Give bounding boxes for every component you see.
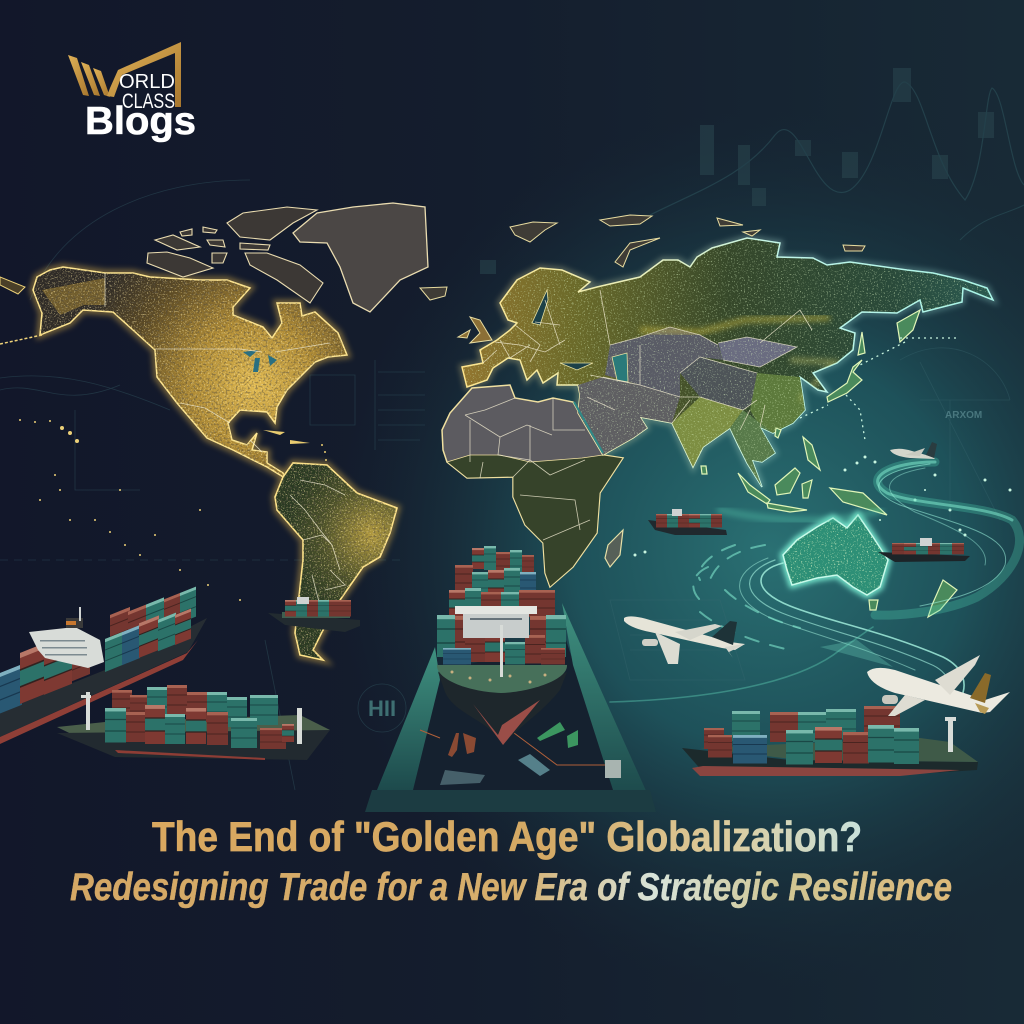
containers front row bbox=[105, 705, 294, 749]
city lights speckle bbox=[33, 267, 396, 660]
mast bbox=[948, 720, 953, 752]
logo text: Blogs bbox=[85, 100, 196, 143]
bridge bbox=[455, 606, 537, 614]
Great Lakes bbox=[243, 350, 277, 372]
plane: middle bbox=[624, 616, 745, 664]
front containers bbox=[704, 725, 919, 764]
containers bbox=[0, 581, 196, 715]
back containers bbox=[732, 706, 900, 742]
ship: left large container ship bbox=[0, 581, 207, 744]
logo: World Class Blogs bbox=[68, 42, 196, 143]
hull and bow bbox=[438, 672, 567, 745]
Southeast Asia green bbox=[730, 410, 775, 487]
right pier bbox=[562, 603, 647, 793]
NE China yellow coast bbox=[790, 360, 835, 400]
left pier bbox=[377, 647, 440, 790]
continent: Australia bbox=[780, 510, 890, 600]
South China green bbox=[750, 373, 805, 433]
hull bbox=[0, 618, 207, 737]
northern islands and UK bbox=[420, 215, 865, 343]
continent: South America bbox=[275, 463, 397, 660]
front stacks bbox=[437, 615, 566, 664]
Mongolia grey bbox=[718, 337, 797, 367]
ship: small ship near South America bbox=[268, 597, 360, 632]
ship: lower right container ship bbox=[682, 706, 978, 776]
water basin bbox=[412, 640, 615, 790]
faint panel label: ARXOM bbox=[945, 410, 982, 421]
superstructure bbox=[29, 627, 104, 668]
Red Sea bbox=[574, 402, 603, 453]
Southern Siberia yellow streaks bbox=[640, 318, 830, 332]
plane: large right bbox=[867, 655, 1010, 716]
faint roundel mark: HII bbox=[368, 696, 396, 721]
Iran and Arabia grey bbox=[578, 377, 680, 455]
logo text: ORLD bbox=[119, 70, 175, 93]
Caribbean islands bbox=[263, 430, 327, 461]
ship: lower left container ship bbox=[57, 685, 330, 760]
rear stacks bbox=[449, 546, 555, 618]
continent: North America bbox=[33, 267, 347, 478]
logo mark: gold W and roof bbox=[68, 42, 181, 107]
title: The End of "Golden Age" Globalization? bbox=[152, 813, 862, 860]
central port dock bbox=[365, 603, 656, 812]
ship: Indian Ocean small container ship bbox=[648, 509, 727, 535]
speckle on Eurasia bbox=[460, 230, 1000, 490]
masts bbox=[86, 692, 90, 730]
Canadian Arctic islands bbox=[147, 207, 323, 303]
bottom quay bbox=[365, 790, 656, 812]
continent: Greenland bbox=[293, 203, 428, 312]
glow under Eurasia bbox=[462, 238, 993, 487]
Alaska bright interior bbox=[42, 278, 105, 315]
faint grid arcs and data panels bbox=[0, 180, 1010, 790]
swirling trade routes bbox=[610, 462, 1020, 705]
glow under the Americas bbox=[33, 267, 397, 660]
country borders bbox=[105, 273, 812, 625]
Kazakhstan and Central Asia grey bbox=[605, 327, 723, 397]
world map bbox=[0, 200, 1012, 670]
containers back row bbox=[112, 685, 278, 727]
Central Africa green region bbox=[447, 455, 623, 587]
continent: Eurasia bbox=[462, 238, 993, 487]
Tibet grey bbox=[680, 357, 757, 410]
plane: small top right bbox=[890, 442, 937, 459]
Aleutian chain and Pacific island lights bbox=[0, 277, 241, 601]
continent: Africa bbox=[442, 385, 623, 587]
ship: Australia coast container ship bbox=[878, 538, 970, 562]
Madagascar bbox=[605, 530, 623, 567]
ship: central container ship bbox=[437, 546, 567, 745]
India yellow green bbox=[672, 397, 743, 467]
deck bbox=[437, 665, 567, 693]
logo text: CLASS bbox=[122, 90, 175, 113]
inland seas bbox=[532, 290, 628, 382]
Asian and Pacific islands bbox=[701, 310, 957, 617]
boats and tugs bbox=[420, 722, 621, 785]
background chart: candlesticks and line, top right bbox=[480, 68, 1024, 274]
logo text bbox=[85, 70, 196, 143]
